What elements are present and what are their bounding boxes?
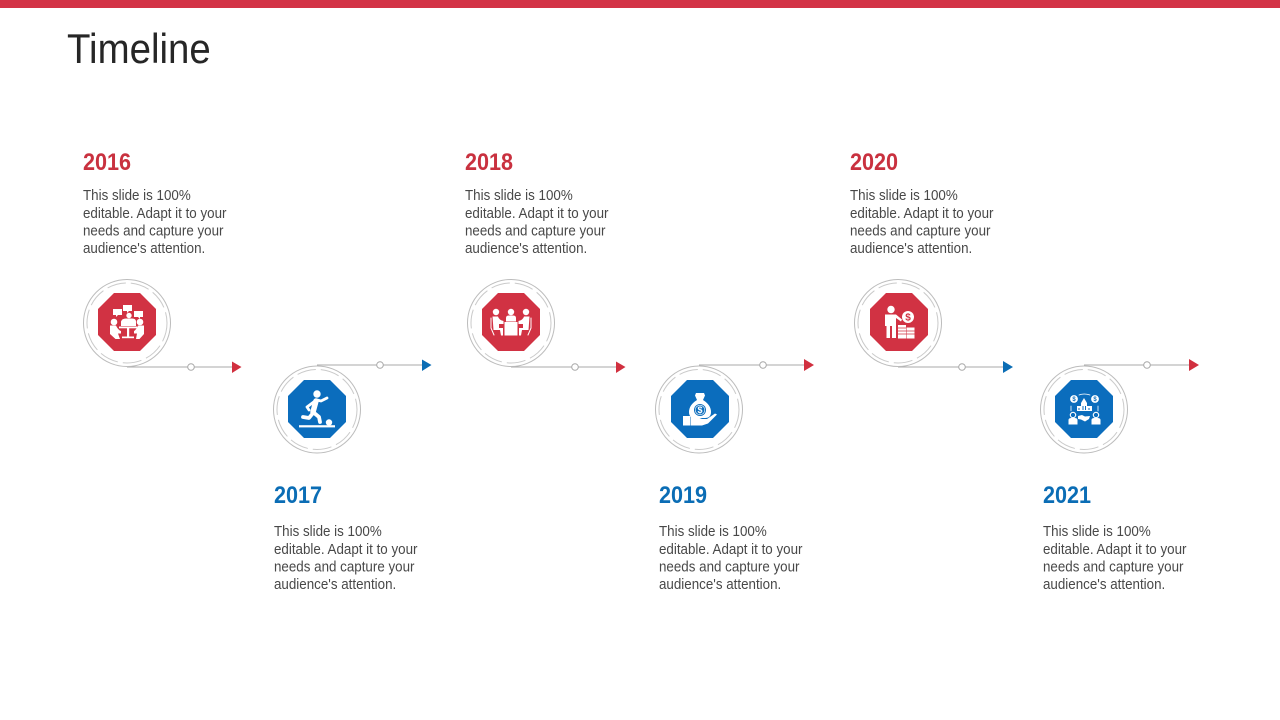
description 2020: This slide is 100% (850, 186, 958, 203)
description 2017: This slide is 100% (274, 522, 382, 539)
description 2021: audience's attention. (1043, 575, 1165, 592)
icon: meeting with speech bubbles (98, 293, 156, 351)
timeline step: 2021 (1040, 359, 1199, 592)
connector arrow 2018 (511, 362, 626, 373)
description 2018: This slide is 100% (465, 186, 573, 203)
ring badge 2020 (854, 280, 942, 366)
description 2019: This slide is 100% (659, 522, 767, 539)
ring badge 2016 (84, 280, 170, 366)
icon: businessman with coin stacks: $ (905, 312, 911, 324)
description 2020: editable. Adapt it to your (850, 204, 994, 221)
description 2016: editable. Adapt it to your (83, 204, 227, 221)
connector arrow 2019 (699, 359, 814, 371)
year heading 2020: 2020 (850, 148, 898, 175)
connector arrow 2016 (127, 362, 242, 373)
description 2016: audience's attention. (83, 239, 205, 256)
description 2017: needs and capture your (274, 558, 415, 574)
timeline step: 2018 (465, 148, 626, 373)
description 2016: needs and capture your (83, 222, 224, 238)
ring badge 2021 (1040, 366, 1128, 453)
timeline step: 2019 (656, 359, 814, 592)
description 2019: needs and capture your (659, 558, 800, 574)
connector arrow 2017 (317, 360, 432, 371)
description 2019: audience's attention. (659, 575, 781, 592)
icon: running player kicking ball (288, 380, 346, 438)
icon: three people at a table (482, 293, 540, 351)
icon: money bag over open hand: $ (697, 405, 703, 415)
icon: money bag over open hand (671, 380, 729, 438)
description 2020: audience's attention. (850, 239, 972, 256)
icon: business deal with buildings and money: $ (1072, 397, 1076, 403)
ring badge 2018 (468, 280, 554, 366)
year heading 2017: 2017 (274, 481, 322, 508)
top accent bar (0, 0, 1280, 8)
timeline step: 2020 (850, 148, 1013, 373)
year heading 2018: 2018 (465, 148, 513, 175)
timeline step: 2016 (83, 148, 242, 373)
year heading 2016: 2016 (83, 148, 131, 175)
description 2018: needs and capture your (465, 222, 606, 238)
ring badge 2017 (274, 366, 360, 453)
description 2021: needs and capture your (1043, 558, 1184, 574)
ring badge 2019 (656, 366, 742, 453)
description 2018: editable. Adapt it to your (465, 204, 609, 221)
description 2020: needs and capture your (850, 222, 991, 238)
year heading 2019: 2019 (659, 481, 707, 508)
description 2021: editable. Adapt it to your (1043, 540, 1187, 557)
description 2016: This slide is 100% (83, 186, 191, 203)
title: Timeline (67, 25, 211, 72)
description 2019: editable. Adapt it to your (659, 540, 803, 557)
description 2021: This slide is 100% (1043, 522, 1151, 539)
timeline step: 2017 (274, 360, 432, 592)
icon: business deal with buildings and money (1055, 380, 1113, 438)
connector arrow 2021 (1084, 359, 1199, 371)
icon: business deal with buildings and money: $ (1093, 397, 1097, 403)
description 2018: audience's attention. (465, 239, 587, 256)
connector arrow 2020 (898, 361, 1013, 373)
icon: businessman with coin stacks (870, 293, 928, 351)
description 2017: editable. Adapt it to your (274, 540, 418, 557)
year heading 2021: 2021 (1043, 481, 1091, 508)
description 2017: audience's attention. (274, 575, 396, 592)
